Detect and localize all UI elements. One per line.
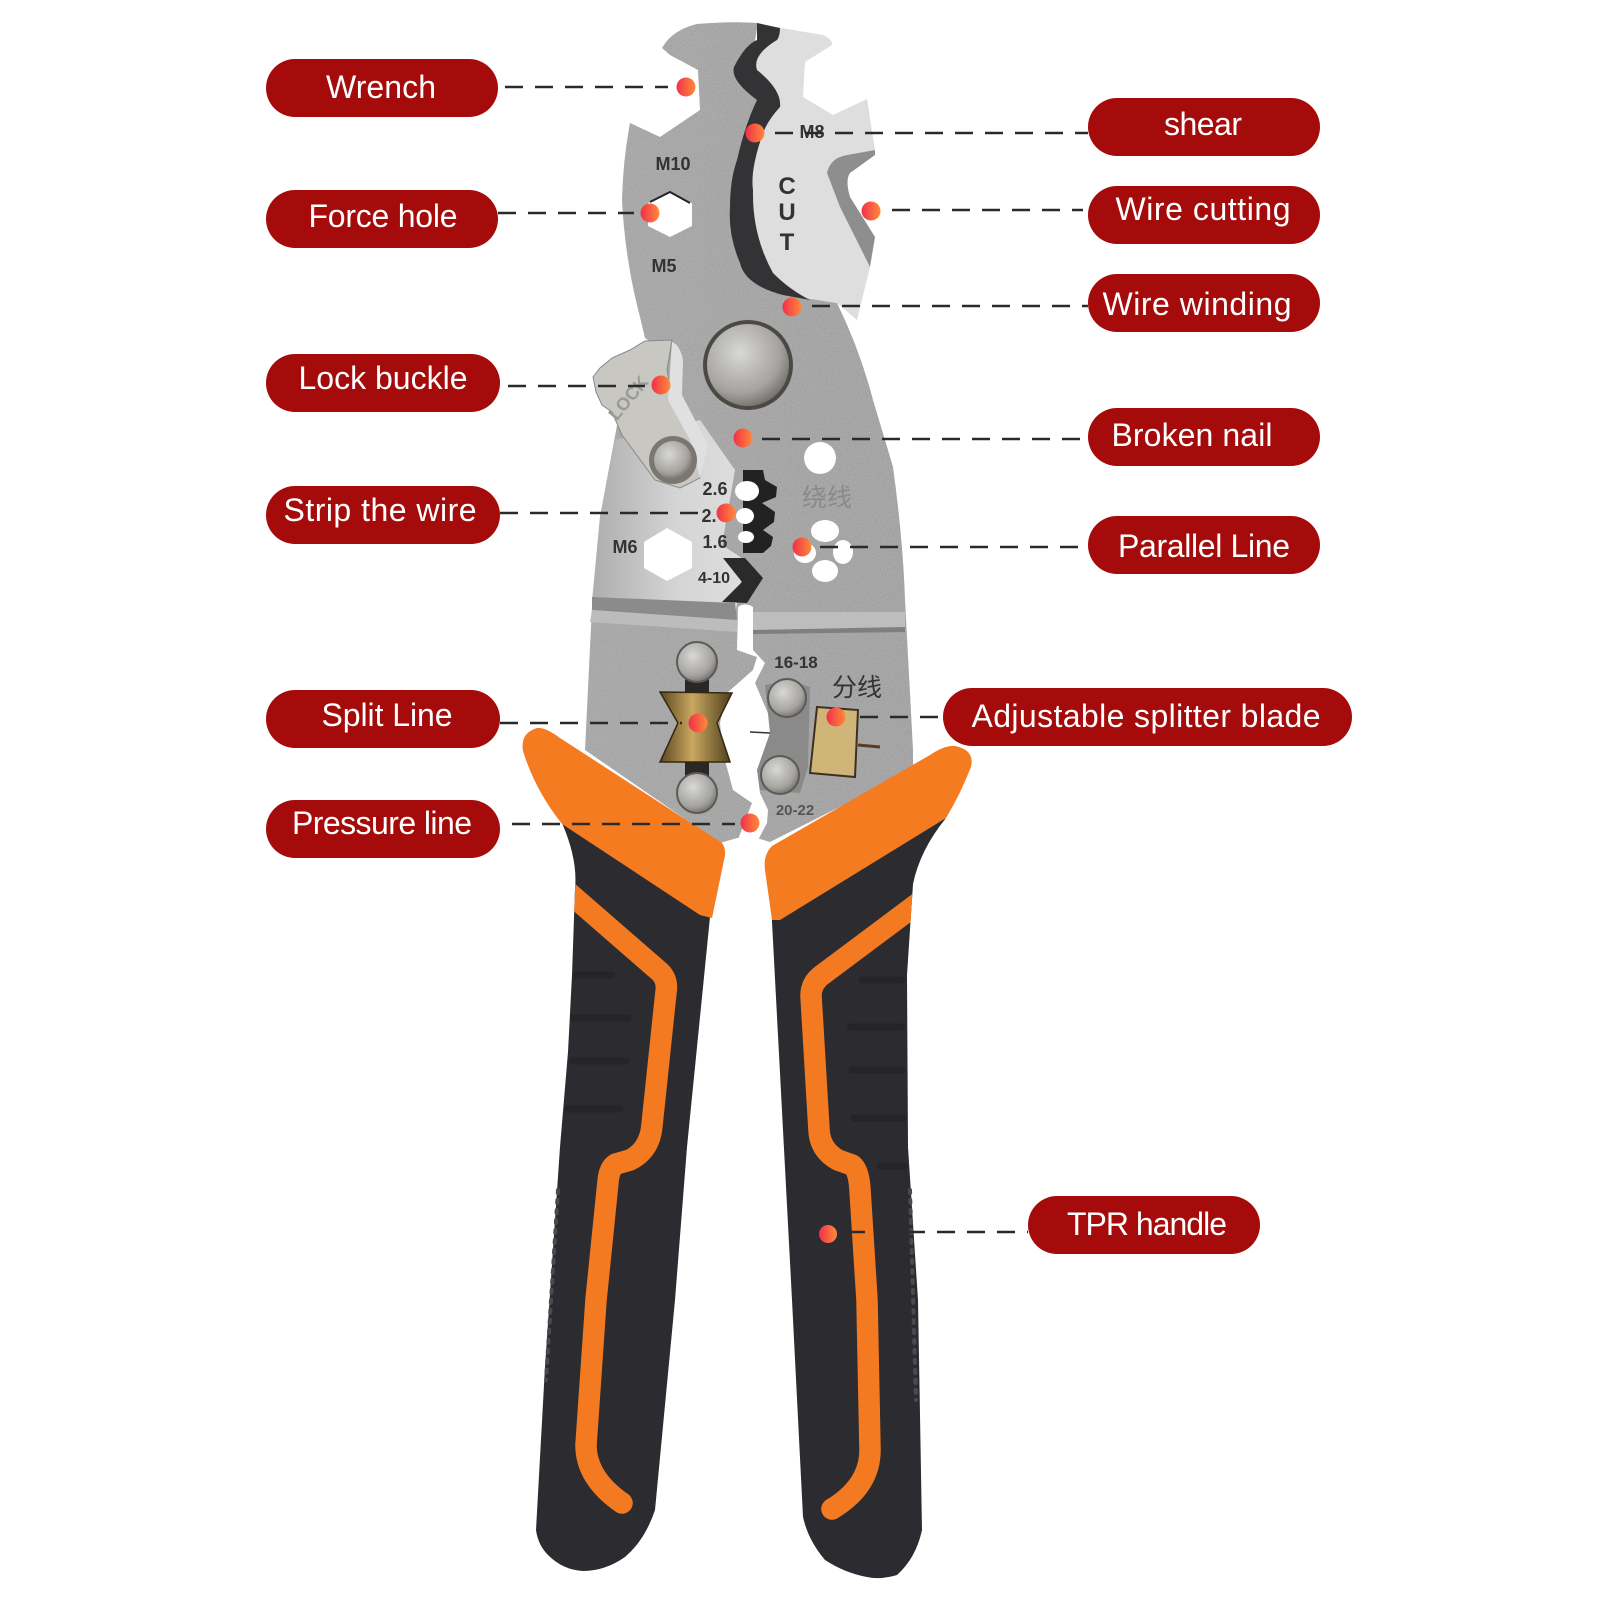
lock buckle bbox=[593, 340, 708, 488]
label: Parallel Line: Parallel Line bbox=[1118, 528, 1290, 564]
M6 hex bbox=[644, 528, 692, 581]
stamped markings: 绕线 bbox=[802, 484, 852, 512]
cutting bevel bbox=[827, 150, 875, 267]
adjustable blade plate bbox=[750, 679, 880, 794]
right handle grip bbox=[772, 818, 946, 1578]
pliers illustration bbox=[523, 22, 972, 1578]
splitter roller bbox=[660, 642, 732, 813]
label: TPR handle: TPR handle bbox=[1067, 1206, 1227, 1242]
jaw fold band bbox=[590, 597, 905, 634]
clover hole bbox=[794, 520, 853, 582]
label: Wire winding bbox=[1088, 274, 1320, 332]
force hole hex bbox=[648, 192, 692, 237]
label: Wire cutting bbox=[1088, 186, 1320, 244]
label: Wire cutting: Wire cutting bbox=[1116, 191, 1290, 227]
leader lines bbox=[498, 87, 1088, 1232]
stamped markings: U bbox=[778, 199, 796, 226]
dark blade edge bbox=[730, 23, 810, 300]
label: shear bbox=[1088, 98, 1320, 156]
left handle grip bbox=[536, 823, 710, 1571]
label: Force hole: Force hole bbox=[308, 198, 458, 234]
stamped markings: 4-10 bbox=[698, 570, 730, 587]
stamped markings: M10 bbox=[655, 154, 691, 174]
label: Pressure line bbox=[266, 800, 500, 858]
label: Wire winding: Wire winding bbox=[1102, 286, 1292, 322]
label: Broken nail: Broken nail bbox=[1112, 417, 1272, 453]
label: Split Line bbox=[266, 690, 500, 748]
marker dots bbox=[640, 78, 880, 1243]
label: TPR handle bbox=[1028, 1196, 1260, 1254]
label: Adjustable splitter blade bbox=[943, 688, 1352, 746]
label: Lock buckle bbox=[266, 354, 500, 412]
label: Pressure line: Pressure line bbox=[292, 805, 472, 841]
right orange cap bbox=[765, 746, 972, 920]
label: Broken nail bbox=[1088, 408, 1320, 466]
stamped markings: T bbox=[780, 229, 795, 256]
stamped markings: M6 bbox=[612, 537, 638, 557]
stamped markings: C bbox=[778, 173, 796, 200]
lower jaw light area bbox=[592, 420, 745, 615]
left handle stripe bbox=[560, 885, 666, 1503]
stamped markings: 2. bbox=[701, 506, 717, 526]
jaw body bbox=[585, 22, 913, 843]
label: Wrench: Wrench bbox=[326, 69, 436, 105]
stamped markings: 1.6 bbox=[702, 532, 728, 552]
right handle stripe bbox=[811, 898, 925, 1509]
label: Lock buckle: Lock buckle bbox=[298, 360, 468, 396]
rivet: main pivot bbox=[703, 320, 793, 410]
right handle ribs bbox=[850, 980, 916, 1400]
stamped markings: M8 bbox=[799, 122, 825, 142]
upper right cutting blade bbox=[745, 27, 875, 320]
wire stripping notches bbox=[722, 470, 777, 603]
label: Wrench bbox=[266, 59, 498, 117]
label: Strip the wire: Strip the wire bbox=[284, 492, 476, 528]
label: Split Line: Split Line bbox=[322, 697, 452, 733]
left orange cap bbox=[523, 728, 725, 918]
label: Adjustable splitter blade: Adjustable splitter blade bbox=[972, 698, 1320, 734]
label: Force hole bbox=[266, 190, 498, 248]
left handle ribs bbox=[546, 975, 628, 1380]
label: shear: shear bbox=[1164, 106, 1242, 142]
stamped markings: 20-22 bbox=[776, 802, 814, 819]
round hole bbox=[804, 442, 836, 474]
stamped markings: 分线 bbox=[832, 674, 882, 702]
text: lock: LOCK bbox=[604, 372, 652, 424]
stamped markings: M5 bbox=[651, 256, 677, 276]
label: Strip the wire bbox=[266, 486, 500, 544]
label: Parallel Line bbox=[1088, 516, 1320, 574]
stamped markings: 2.6 bbox=[702, 479, 728, 499]
stamped markings bbox=[612, 122, 882, 819]
centre white slit bbox=[720, 604, 773, 842]
stamped markings: 16-18 bbox=[774, 653, 818, 672]
